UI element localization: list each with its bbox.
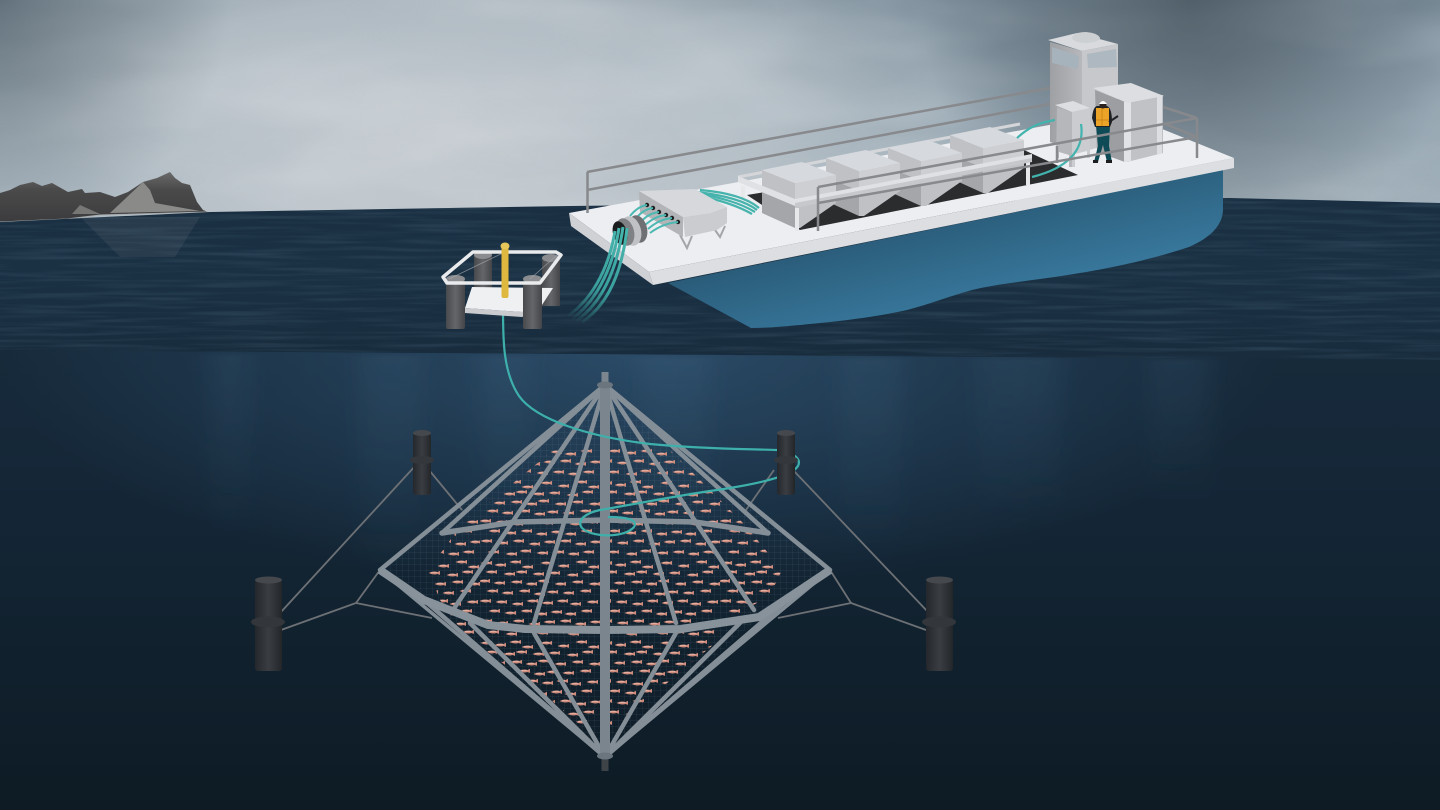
distribution box (639, 189, 727, 248)
worker (1092, 101, 1118, 163)
outlet pipe (610, 213, 650, 248)
buoy: back right (774, 430, 798, 495)
center pole (597, 372, 613, 771)
island on the horizon (0, 172, 208, 222)
frame back rail (738, 124, 1020, 177)
salmon school (429, 448, 781, 725)
raft back cylinders (474, 251, 560, 306)
raft ring (443, 252, 561, 283)
buoy: back left (410, 430, 434, 495)
back railing (587, 88, 1050, 213)
raft front cylinders (446, 275, 542, 329)
mooring lines (281, 465, 928, 630)
teal hose bundle behind box (697, 190, 759, 214)
equipment well (747, 150, 1078, 230)
hoses from box to pipe (630, 205, 678, 233)
buoy: front left (251, 576, 285, 671)
net mesh (388, 400, 822, 743)
front ring (380, 570, 830, 630)
storage bins (738, 124, 1024, 228)
mooring buoys (251, 430, 956, 671)
raft with control buoy (443, 242, 561, 329)
small cabinet (1055, 101, 1090, 167)
wheelhouse (1048, 32, 1118, 152)
hoses over the side (568, 227, 627, 322)
raft platform (465, 287, 553, 317)
sky (0, 0, 1440, 225)
underwater (0, 350, 1440, 810)
rear cabinet (1093, 83, 1164, 162)
deck (569, 112, 1234, 285)
front railing (818, 107, 1197, 231)
hull (668, 170, 1223, 328)
teal cable (503, 308, 799, 535)
yellow pole (449, 242, 556, 298)
buoy: front right (922, 576, 956, 671)
sea surface (0, 195, 1440, 365)
net cage (380, 372, 830, 771)
back ring and ribs (380, 385, 830, 757)
teal hoses on deck (1017, 120, 1082, 177)
bin frame (738, 154, 1032, 231)
barge (568, 32, 1234, 328)
